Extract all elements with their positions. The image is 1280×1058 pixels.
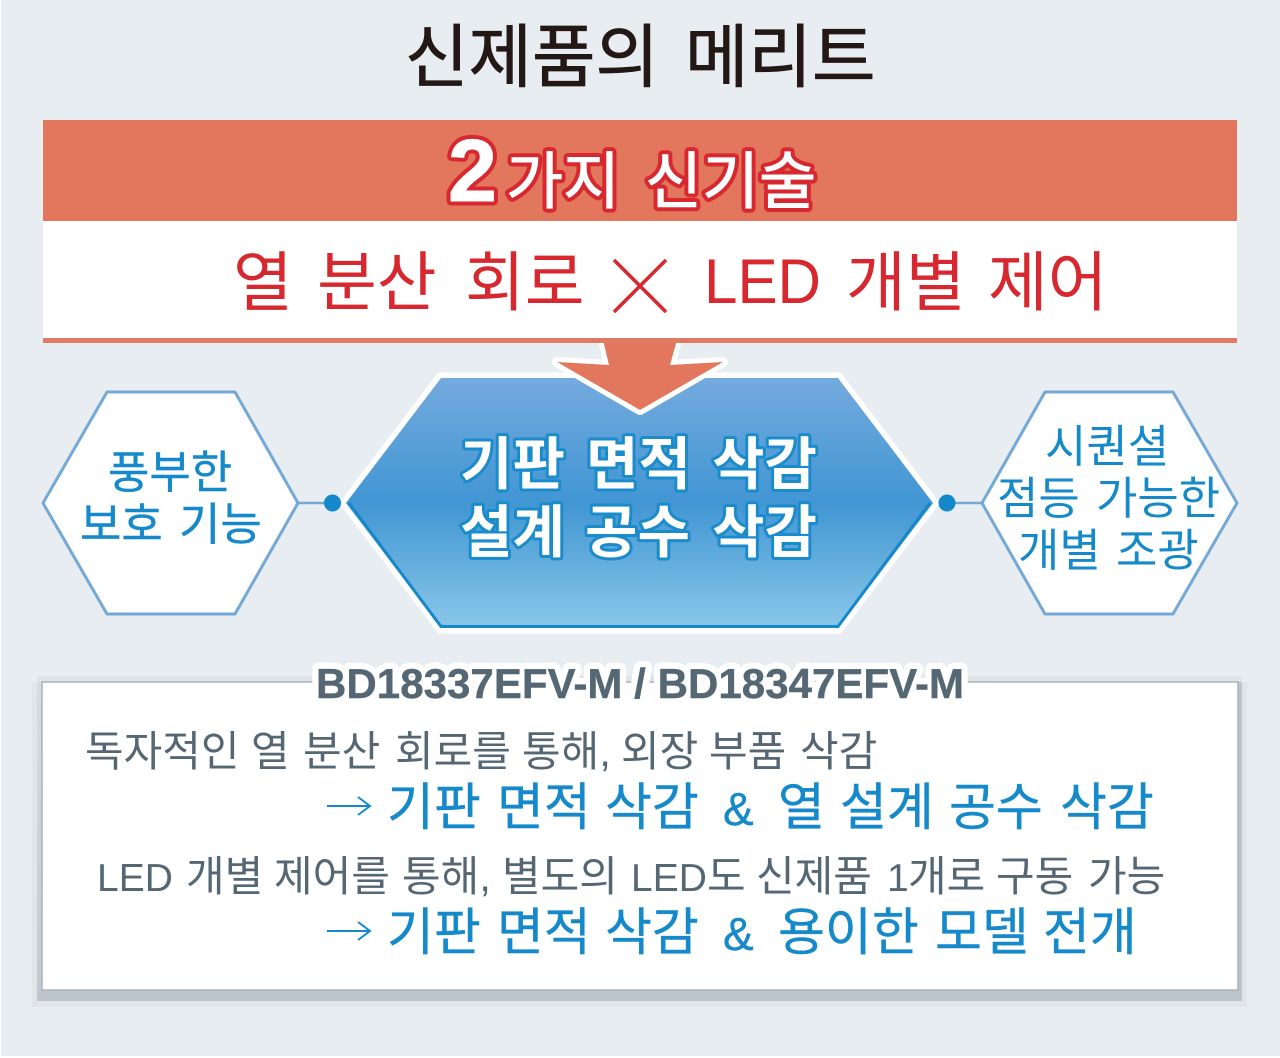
heading: 2 new technologies: 2 [448, 121, 497, 220]
text: rich protection features: 기능 [179, 499, 262, 550]
text: thermal dispersion circuit: 열 [233, 246, 293, 319]
icon: arrow 2 [327, 922, 370, 940]
heading: 2 new technologies: 2 [448, 121, 497, 220]
text: board area and design effort reduction [460, 433, 817, 565]
text: result 1: 설계 [840, 779, 934, 836]
text: thermal dispersion benefit: 회로를 [395, 728, 511, 775]
text: board area and design effort reduction: 면적 [586, 433, 691, 497]
icon: multiply sign [614, 260, 666, 312]
text: result 2: 전개 [1043, 904, 1137, 961]
panel: two new technologies [43, 120, 1237, 343]
text: rich protection features [80, 447, 262, 550]
text: result 2: 삭감 [605, 904, 699, 961]
text: result 2: & [723, 908, 754, 960]
text: LED control benefit: 도 [707, 853, 746, 900]
text: LED control benefit: 개로 [908, 853, 985, 900]
text: board area and design effort reduction: 기판 [460, 433, 565, 497]
heading: product names: BD18337EFV-M / BD18347EFV-M [316, 660, 964, 707]
heading: product names: BD18337EFV-M / BD18347EFV-M [316, 660, 964, 707]
text: LED control benefit: 개별 [186, 853, 263, 900]
text: thermal dispersion circuit: 분산 [317, 246, 437, 319]
text: thermal dispersion benefit: 열 [251, 728, 290, 775]
text: result 1: 열 [778, 779, 825, 836]
text: LED individual control: 제어 [988, 246, 1108, 319]
heading: 2 new technologies: 신기술 [645, 148, 816, 217]
text: board area and design effort reduction: 설계 [460, 501, 565, 565]
text: LED control benefit: 제어를 [274, 853, 390, 900]
text: board area and design effort reduction: 삭감 [712, 501, 817, 565]
heading: 2 new technologies: 가지 [506, 148, 620, 217]
text: board area and design effort reduction: 삭감 [712, 433, 817, 497]
text: LED control benefit: 신제품 [756, 853, 872, 900]
text: thermal dispersion benefit: 통해, [522, 728, 611, 775]
text: LED control benefit: LED [631, 857, 707, 900]
heading: 2 new technologies [448, 121, 816, 220]
title: 메리트 [685, 19, 875, 96]
text: result 1: & [723, 783, 754, 835]
text: result 2: 모델 [935, 904, 1029, 961]
text: sequential lighting capable individual dimming [997, 421, 1220, 576]
text: rich protection features: 풍부한 [108, 447, 232, 498]
text: result 2: 기판 [387, 904, 481, 961]
text: result 1: 공수 [949, 779, 1043, 836]
text: LED control benefit: 별도의 [502, 853, 618, 900]
heading: 2 new technologies: 신기술 [645, 148, 816, 217]
text: LED control benefit: 가능 [1088, 853, 1165, 900]
text: rich protection features: 보호 [80, 499, 163, 550]
text: result 1: 삭감 [605, 779, 699, 836]
arrow [557, 340, 723, 410]
heading: 2 new technologies: 가지 [506, 148, 620, 217]
connector: left [298, 494, 341, 512]
title: 신제품의 [405, 19, 659, 96]
panel: left hexagon [43, 392, 298, 614]
text: result 2: 면적 [497, 904, 591, 961]
text: LED individual control [704, 246, 1108, 319]
text: LED individual control: LED [704, 247, 821, 317]
text: board area and design effort reduction: 공수 [585, 501, 690, 565]
icon: arrow 1 [327, 797, 370, 815]
text: LED control benefit: 1 [887, 857, 909, 900]
text: LED control benefit: LED [97, 857, 173, 900]
text: thermal dispersion benefit: 독자적인 [85, 728, 240, 775]
text: result 2: 용이한 [778, 904, 919, 961]
text: thermal dispersion circuit: 회로 [465, 246, 585, 319]
text: result 1: 면적 [497, 779, 591, 836]
text: thermal dispersion benefit: 분산 [303, 728, 380, 775]
text: result 1: 기판 [387, 779, 481, 836]
text: result 1: 삭감 [1060, 779, 1154, 836]
text: sequential lighting capable individual dimming: 조광 [1116, 525, 1199, 576]
text: thermal dispersion benefit: 외장 [621, 728, 698, 775]
text: LED individual control: 개별 [846, 246, 966, 319]
text: thermal dispersion benefit: 부품 [709, 728, 786, 775]
text: sequential lighting capable individual dimming: 가능한 [1096, 473, 1220, 524]
connector: right [938, 494, 982, 512]
text: thermal dispersion benefit: 삭감 [800, 728, 877, 775]
text: LED control benefit: 구동 [996, 853, 1073, 900]
text: sequential lighting capable individual dimming: 시퀀셜 [1045, 421, 1169, 472]
panel: center hexagon [346, 378, 933, 628]
text: LED control benefit: 통해, [402, 853, 491, 900]
text: sequential lighting capable individual dimming: 개별 [1018, 525, 1101, 576]
text: sequential lighting capable individual dimming: 점등 [997, 473, 1080, 524]
panel: right hexagon [982, 392, 1237, 614]
panel: product details [32, 660, 1247, 1007]
heading band [43, 120, 1237, 221]
